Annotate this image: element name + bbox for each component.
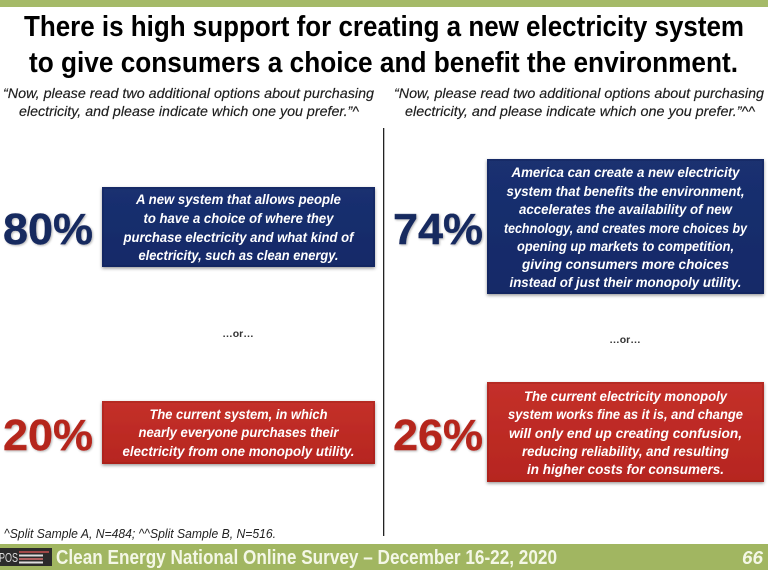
right or label: …or… [609,334,641,346]
footer logo [0,548,52,566]
page number: 66 [742,548,764,568]
footnote: ^Split Sample A, N=484; ^^Split Sample B, N=516. [4,527,276,541]
top green band [0,0,768,7]
left or label: …or… [222,328,254,340]
left 20% stat: 20% [3,411,93,460]
right red option box: system works fine as it is, and change [508,406,743,422]
right blue option box: accelerates the availability of new [519,201,733,217]
left blue option box: electricity, such as clean energy. [138,247,338,263]
vertical divider [383,128,384,536]
footer title: Clean Energy National Online Survey – December 16-22, 2020 [56,547,557,569]
left red option box [102,401,375,464]
left blue option box [102,187,375,267]
left red option box: electricity from one monopoly utility. [122,443,354,459]
right blue option box: system that benefits the environment, [506,183,744,199]
right question text: electricity, and please indicate which one you prefer.”^^ [405,103,755,119]
right blue option box: instead of just their monopoly utility. [510,274,742,290]
right question text: “Now, please read two additional options about purchasing [394,85,764,101]
right blue option box: giving consumers more choices [521,256,729,272]
right blue option box [487,159,764,294]
title [24,11,744,79]
right question text [394,85,764,119]
right blue option box: opening up markets to competition, [517,238,734,254]
left question text: electricity, and please indicate which one you prefer.”^ [19,103,359,119]
left blue option box: A new system that allows people [135,191,341,207]
right blue option box: America can create a new electricity [511,164,741,180]
left blue option box: purchase electricity and what kind of [123,229,355,245]
footer band [0,544,768,570]
left red option box: nearly everyone purchases their [138,424,340,440]
right 74% stat: 74% [393,205,483,254]
right red option box: in higher costs for consumers. [527,461,724,477]
left question text [3,85,374,119]
right red option box: The current electricity monopoly [524,388,728,404]
left red option box: The current system, in which [150,406,328,422]
right red option box [487,382,764,482]
left blue option box: to have a choice of where they [144,210,335,226]
right 26% stat: 26% [393,411,483,460]
right red option box: reducing reliability, and resulting [522,443,729,459]
left question text: “Now, please read two additional options about purchasing [3,85,374,101]
left 80% stat: 80% [3,205,93,254]
right red option box: will only end up creating confusion, [509,425,742,441]
